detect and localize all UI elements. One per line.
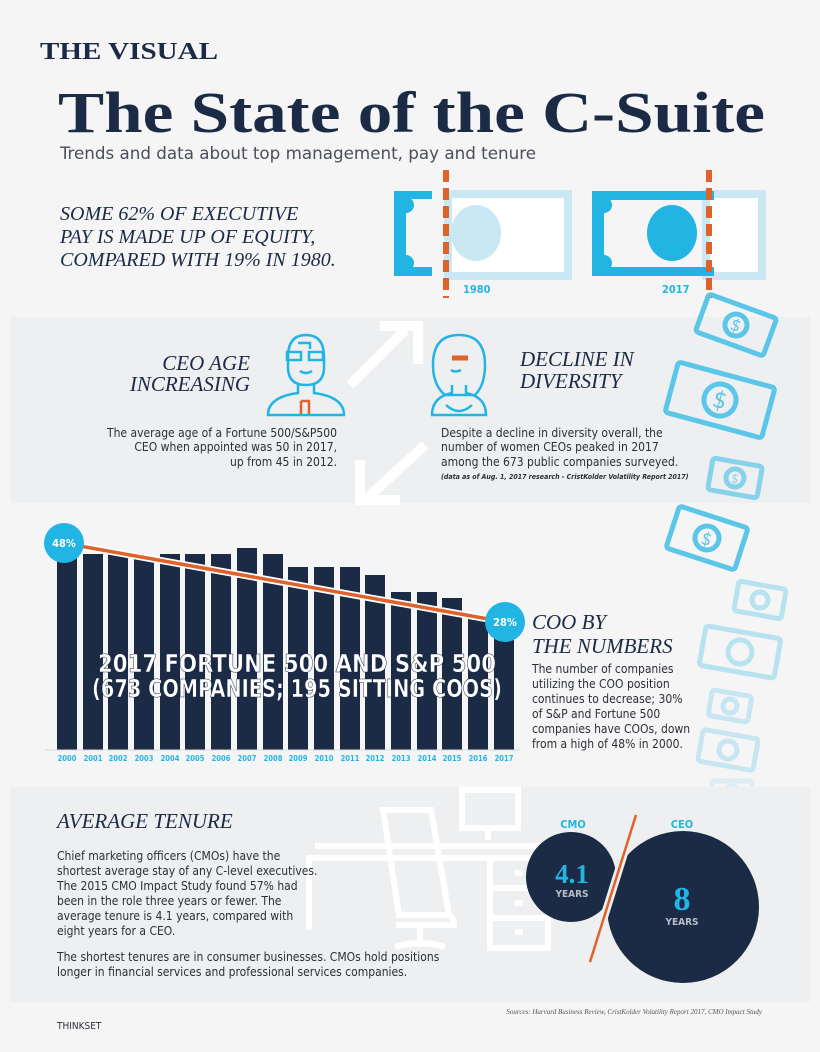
text: diversity: Despite a decline in diversity overall, the [441, 426, 663, 440]
heading: COO by the numbers [532, 610, 673, 658]
chart: CMO tenure circle: 4.1 [555, 859, 589, 889]
axis year labels: 2012 [366, 754, 385, 763]
icon: falling money bills [665, 294, 786, 805]
icon: woman CEO [432, 335, 486, 415]
text: diversity: (data as of Aug. 1, 2017 research - CristKolder Volatility Report 2017) [441, 473, 689, 481]
text: CEO age: The average age of a Fortune 500/S&P500 [106, 426, 337, 440]
text: tenure paragraph: longer in financial services and professional services companies. [57, 965, 407, 979]
text: COO: utilizing the COO position [532, 677, 670, 691]
equity statement [59, 203, 336, 271]
text: COO: The number of companies [531, 662, 674, 676]
bill illustration 1980: 1980 [463, 283, 491, 296]
divider slash [590, 815, 636, 962]
chart overlay label [92, 649, 502, 703]
axis year labels: 2000 [58, 754, 77, 763]
chart: CEO tenure circle [607, 818, 759, 983]
icon: falling money bills: $ [728, 315, 744, 337]
panel: average tenure [10, 787, 810, 1002]
axis year labels: 2011 [341, 754, 360, 763]
icon: desk and chair [309, 790, 549, 948]
panel: CEO age and diversity [10, 317, 810, 503]
icon: falling money bills: $ [698, 528, 715, 551]
text: diversity: number of women CEOs peaked in 2017 [441, 440, 659, 454]
text: COO: of S&P and Fortune 500 [532, 707, 660, 721]
equity statement: PAY IS MADE UP OF EQUITY, [59, 226, 315, 248]
axis year labels: 2014 [418, 754, 437, 763]
heading: decline in diversity: DIVERSITY [519, 369, 624, 393]
callout: 28% [485, 602, 525, 642]
axis year labels: 2008 [264, 754, 283, 763]
axis year labels: 2003 [135, 754, 154, 763]
text: tenure paragraph: The shortest tenures are in consumer businesses. CMOs hold positions [56, 950, 440, 964]
axis year labels: 2002 [109, 754, 128, 763]
axis year labels: 2006 [212, 754, 231, 763]
heading: CEO age increasing: INCREASING [129, 372, 250, 396]
text: COO: companies have COOs, down [532, 722, 690, 736]
arrow: up-right [350, 326, 418, 385]
chart overlay label: (673 COMPANIES; 195 SITTING COOS) [92, 674, 502, 703]
text: tenure paragraph: been in the role three years or fewer. The [57, 894, 282, 908]
axis year labels: 2015 [443, 754, 462, 763]
axis year labels [58, 754, 514, 763]
text: CEO age: up from 45 in 2012. [230, 455, 337, 469]
text: diversity [441, 426, 689, 481]
chart: CEO tenure circle: 8 [674, 881, 690, 918]
text: COO [531, 662, 690, 751]
axis year labels: 2010 [315, 754, 334, 763]
text: tenure paragraph: The 2015 CMO Impact Study found 57% had [56, 879, 298, 893]
text: tenure paragraph: eight years for a CEO. [57, 924, 175, 938]
text: tenure paragraph: Chief marketing officers (CMOs) have the [57, 849, 281, 863]
chart: CMO tenure circle [526, 818, 616, 922]
chart: CMO tenure circle: YEARS [554, 889, 589, 900]
sources note: Sources: Harvard Business Review, CristKolder Volatility Report 2017, CMO Impact Study [506, 1008, 763, 1016]
text: diversity: among the 673 public companies surveyed. [441, 455, 678, 469]
axis year labels: 2017 [495, 754, 514, 763]
text: tenure paragraph: shortest average stay of any C-level executives. [57, 864, 317, 878]
bill illustration 2017: 2017 [662, 283, 690, 296]
heading: CEO age increasing [129, 351, 250, 396]
heading: decline in diversity [519, 347, 635, 393]
arrow: down-left [360, 445, 425, 500]
icon: male CEO [268, 335, 344, 415]
axis year labels: 2013 [392, 754, 411, 763]
chart: CMO tenure circle: CMO [560, 818, 586, 831]
callout: 48%: 48% [52, 537, 76, 550]
text: CEO age [106, 426, 337, 469]
axis year labels: 2005 [186, 754, 205, 763]
text: COO: continues to decrease; 30% [532, 692, 682, 706]
heading: COO by the numbers: COO BY [532, 610, 608, 634]
heading: decline in diversity: DECLINE IN [519, 347, 635, 371]
heading: CEO age increasing: CEO AGE [162, 351, 250, 375]
bill illustration 1980 [394, 170, 568, 298]
axis year labels: 2009 [289, 754, 308, 763]
trend line [63, 543, 505, 622]
callout: 28%: 28% [493, 616, 517, 629]
heading: COO by the numbers: THE NUMBERS [532, 634, 673, 658]
bar chart: COO share 2000-2017 [44, 523, 525, 763]
callout: 48% [44, 523, 84, 563]
chart: CEO tenure circle: CEO [671, 818, 693, 831]
chart: CEO tenure circle: YEARS [664, 917, 699, 928]
text: tenure paragraph [56, 849, 440, 979]
subtitle: Trends and data about top management, pay and tenure [59, 144, 536, 164]
brand: THE VISUAL: THE VISUAL [40, 39, 218, 65]
axis year labels: 2016 [469, 754, 488, 763]
title: The State of the C-Suite [58, 80, 765, 145]
icon: falling money bills: $ [730, 471, 740, 488]
heading: average tenure: AVERAGE TENURE [55, 809, 233, 833]
text: tenure paragraph: average tenure is 4.1 years, compared with [57, 909, 293, 923]
text: COO: from a high of 48% in 2000. [532, 737, 683, 751]
axis year labels: 2004 [161, 754, 180, 763]
footer brand: THINKSET [56, 1021, 102, 1032]
equity statement: SOME 62% OF EXECUTIVE [60, 203, 298, 225]
axis year labels: 2007 [238, 754, 257, 763]
icon: falling money bills: $ [710, 385, 730, 415]
equity statement: COMPARED WITH 19% IN 1980. [60, 249, 336, 271]
text: CEO age: CEO when appointed was 50 in 2017, [134, 440, 337, 454]
bill illustration 2017 [592, 170, 762, 298]
chart overlay label: 2017 FORTUNE 500 AND S&P 500 [98, 649, 496, 678]
axis year labels: 2001 [84, 754, 103, 763]
